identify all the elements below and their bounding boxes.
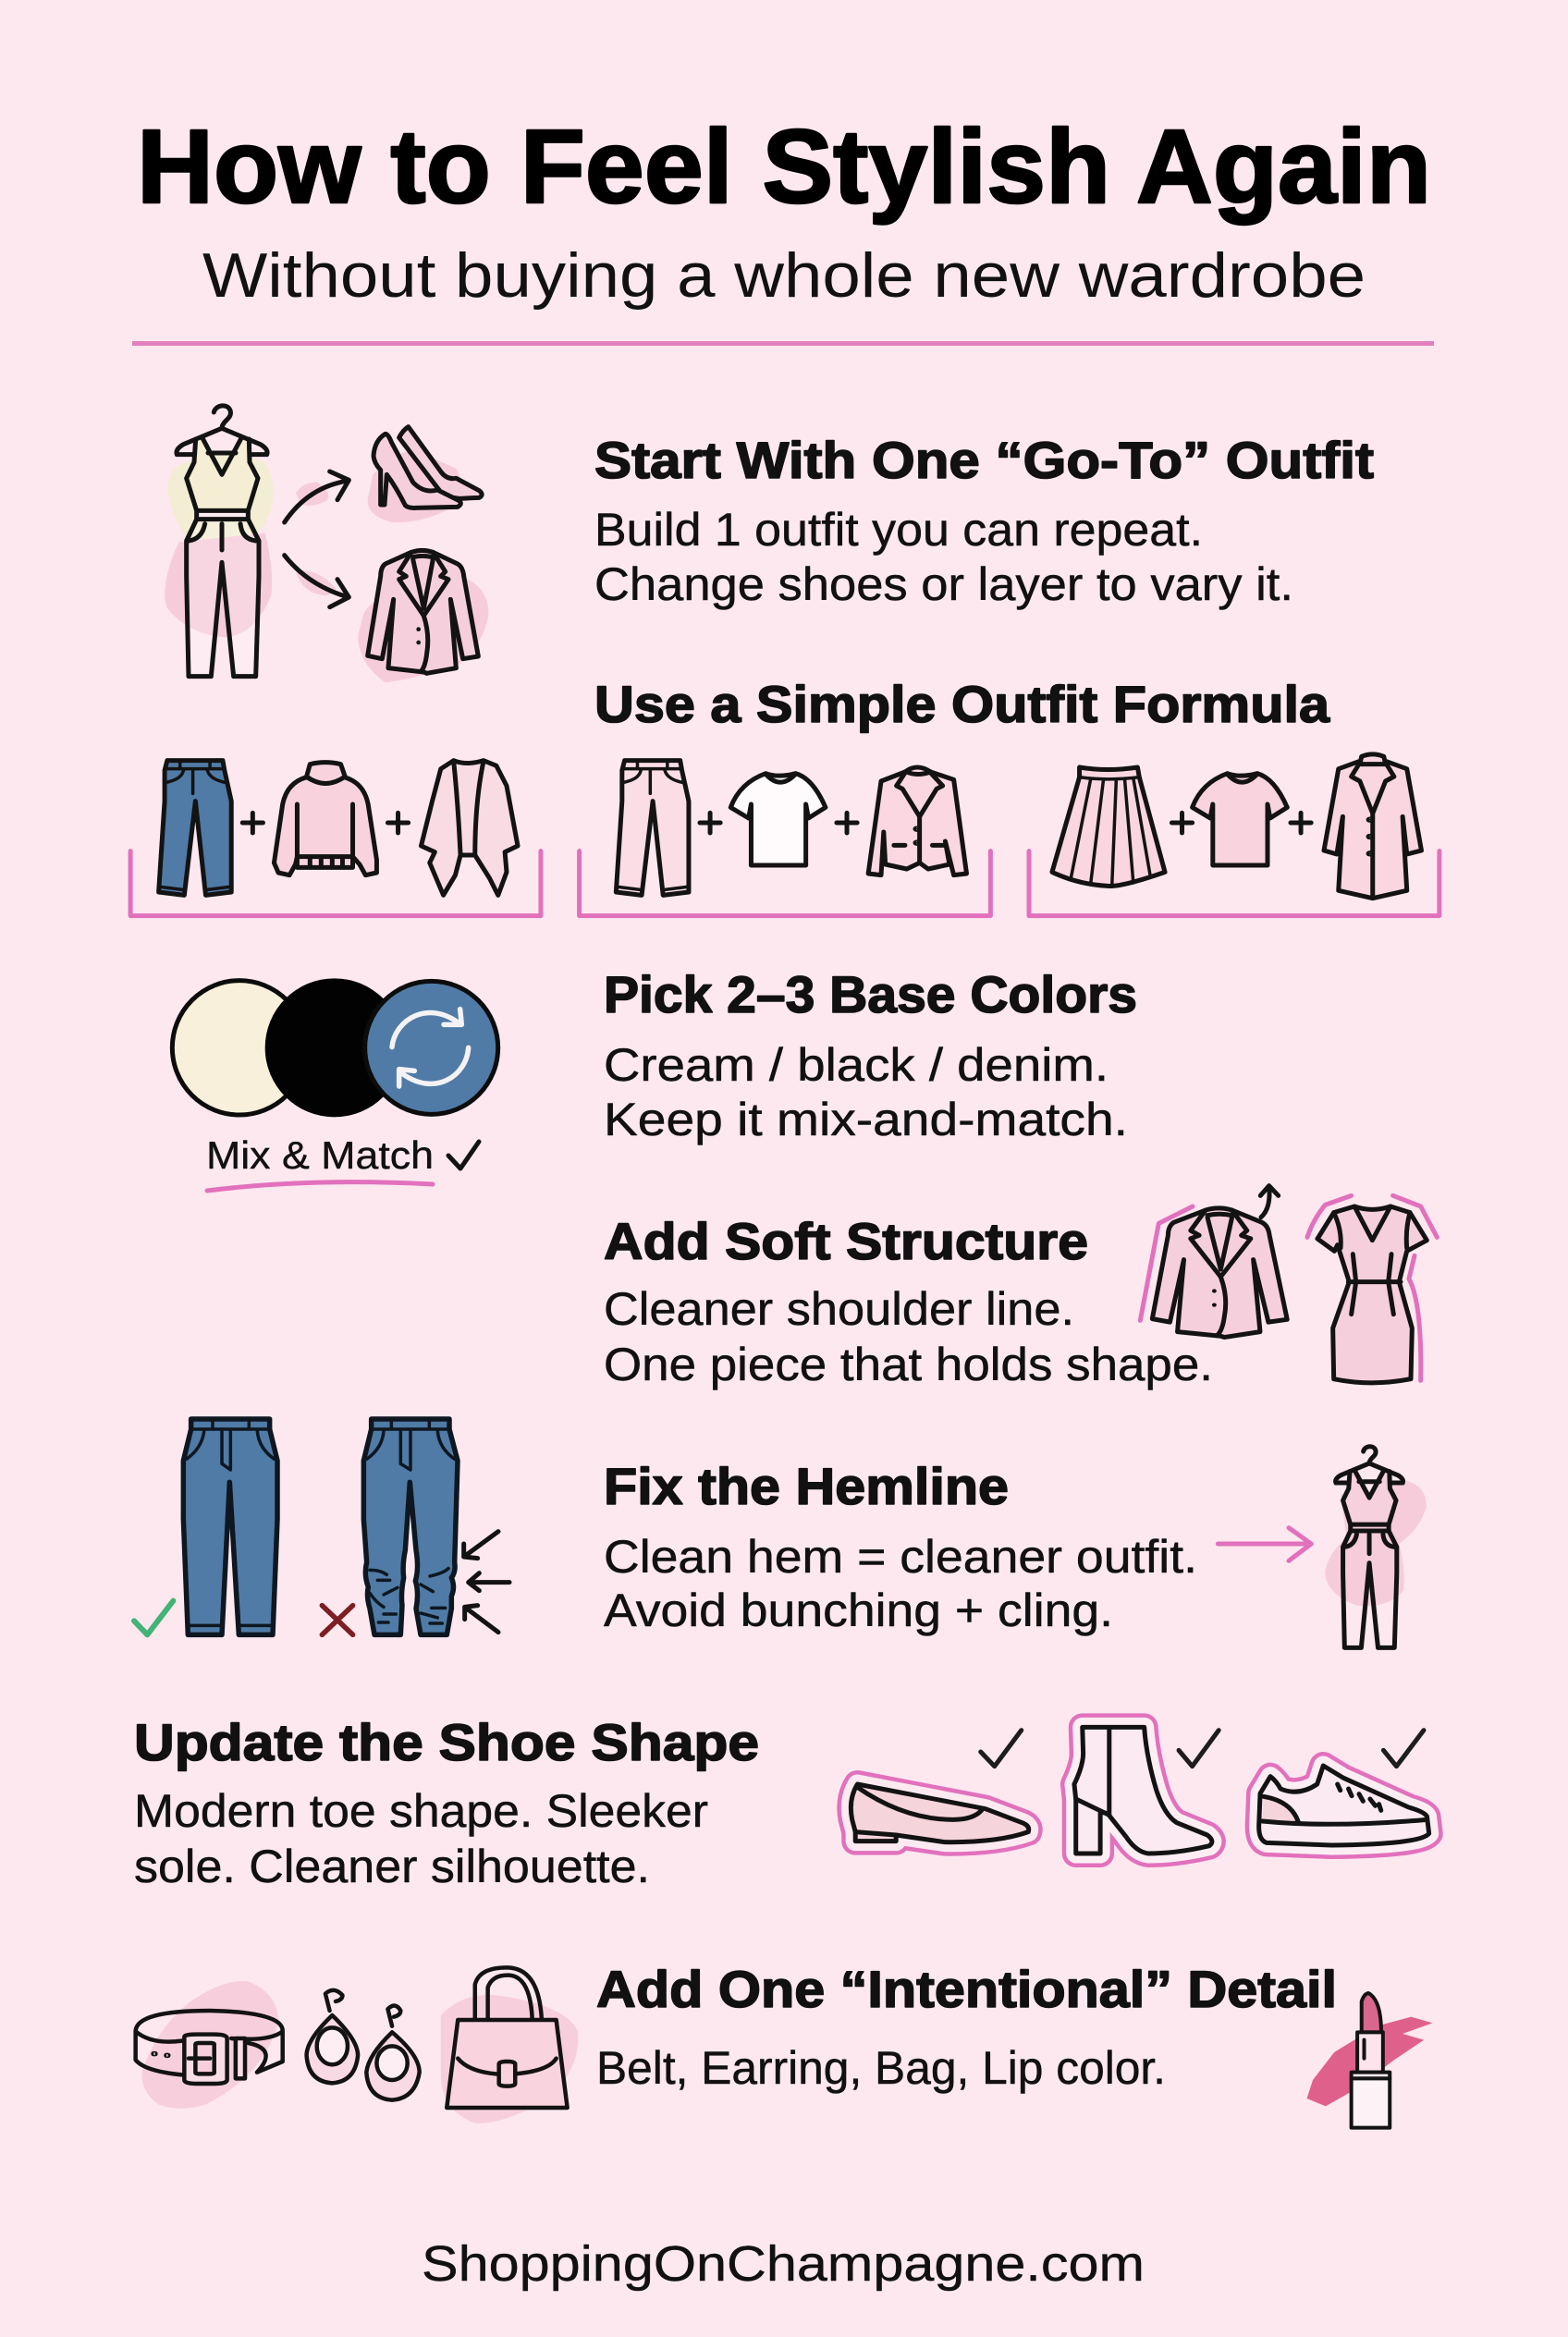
blob: belt	[141, 1981, 278, 2109]
icon: small jumpsuit	[1336, 1447, 1403, 1647]
icon: ankle boot	[1074, 1727, 1212, 1854]
arrow: to shoes	[285, 471, 349, 522]
heading: soft structure: Add Soft Structure	[604, 1212, 1088, 1270]
icon: lipstick	[1352, 1993, 1390, 2128]
icon: trousers	[616, 761, 689, 895]
arrow: pink to outfit	[1218, 1528, 1311, 1560]
icon: ballet flat	[851, 1784, 1029, 1842]
body: base colors: Cream / black / denim.	[604, 1039, 1109, 1091]
brackets	[130, 851, 1439, 916]
arrows: bunching	[464, 1532, 509, 1633]
lip smear	[1307, 2017, 1432, 2106]
heading: intentional detail: Add One “Intentional” Detail	[596, 1960, 1337, 2018]
body: shoe shape: Modern toe shape. Sleeker	[134, 1785, 708, 1837]
denim swatch	[365, 981, 498, 1114]
illustration: accessories	[136, 1967, 1432, 2128]
icon: blazer	[368, 550, 478, 673]
icon: belt	[136, 2011, 283, 2084]
plus signs	[242, 813, 1311, 833]
footer url: ShoppingOnChampagne.com	[422, 2236, 1145, 2292]
heading: hemline: Fix the Hemline	[604, 1457, 1009, 1515]
label: mix and match: Mix & Match	[206, 1133, 434, 1177]
icon: bunched jeans	[363, 1419, 458, 1634]
subtitle: Without buying a whole new wardrobe	[202, 240, 1366, 311]
outfit formula row	[130, 754, 1439, 916]
title: How to Feel Stylish Again	[137, 108, 1431, 225]
icon: check	[448, 1142, 479, 1168]
icon: green check	[134, 1601, 173, 1634]
icon: cardigan	[422, 761, 518, 895]
arrow: up	[1260, 1186, 1279, 1217]
icon: turtleneck sweater	[274, 763, 376, 875]
icon: t-shirt	[730, 774, 826, 865]
illustration: structured blazer and dress	[1140, 1186, 1437, 1647]
blob: bag	[441, 1995, 578, 2123]
icon: red cross	[322, 1606, 353, 1634]
illustration: jeans comparison	[134, 1419, 509, 1634]
body: hemline: Clean hem = cleaner outfit.	[604, 1531, 1197, 1583]
arrow: to blazer	[285, 556, 349, 607]
icon: refresh arrows	[392, 1009, 469, 1086]
cream swatch	[172, 981, 307, 1115]
body: hemline line 2: Avoid bunching + cling.	[604, 1585, 1113, 1636]
body: soft structure line 2: One piece that holds shape.	[604, 1339, 1213, 1390]
icon: small blazer	[868, 767, 966, 875]
heading: base colors: Pick 2–3 Base Colors	[604, 965, 1137, 1023]
blobs	[165, 451, 488, 682]
heading: shoe shape: Update the Shoe Shape	[134, 1713, 759, 1771]
icon: sneaker	[1259, 1766, 1429, 1845]
pink contour lines: dress	[1307, 1195, 1437, 1380]
body: go-to outfit: Build 1 outfit you can repeat.	[594, 504, 1203, 556]
body: base colors line 2: Keep it mix-and-match.	[604, 1094, 1128, 1145]
icon: heels	[374, 427, 482, 508]
heading: go-to outfit: Start With One “Go-To” Outfit	[594, 431, 1374, 489]
body: intentional detail: Belt, Earring, Bag, Lip color.	[596, 2042, 1166, 2094]
icon: coat	[1324, 754, 1421, 899]
icon: pleated skirt	[1052, 767, 1165, 886]
blob behind small jumpsuit	[1325, 1481, 1427, 1606]
icon: dress	[1317, 1206, 1427, 1383]
underline	[207, 1182, 433, 1191]
body: soft structure: Cleaner shoulder line.	[604, 1283, 1074, 1335]
icon: pink tee	[1193, 774, 1287, 865]
body: go-to outfit line 2: Change shoes or layer to vary it.	[594, 558, 1293, 610]
icon: handbag	[447, 1967, 568, 2108]
heading: formula: Use a Simple Outfit Formula	[594, 675, 1330, 733]
icon: blazer	[1152, 1208, 1287, 1338]
illustration: go-to outfit with shoes and blazer	[165, 406, 488, 682]
icons: check marks	[981, 1731, 1424, 1767]
black swatch	[265, 978, 404, 1117]
icon: earrings	[307, 1990, 420, 2100]
pink shoulder line: blazer	[1140, 1206, 1193, 1320]
body: shoe shape line 2: sole. Cleaner silhouette.	[134, 1841, 650, 1892]
illustration: shoes with halos	[851, 1727, 1429, 1854]
icon: jeans	[159, 761, 231, 895]
icon: clean hem jeans	[183, 1419, 277, 1634]
color swatches	[172, 978, 498, 1117]
jumpsuit on hanger	[177, 406, 267, 677]
